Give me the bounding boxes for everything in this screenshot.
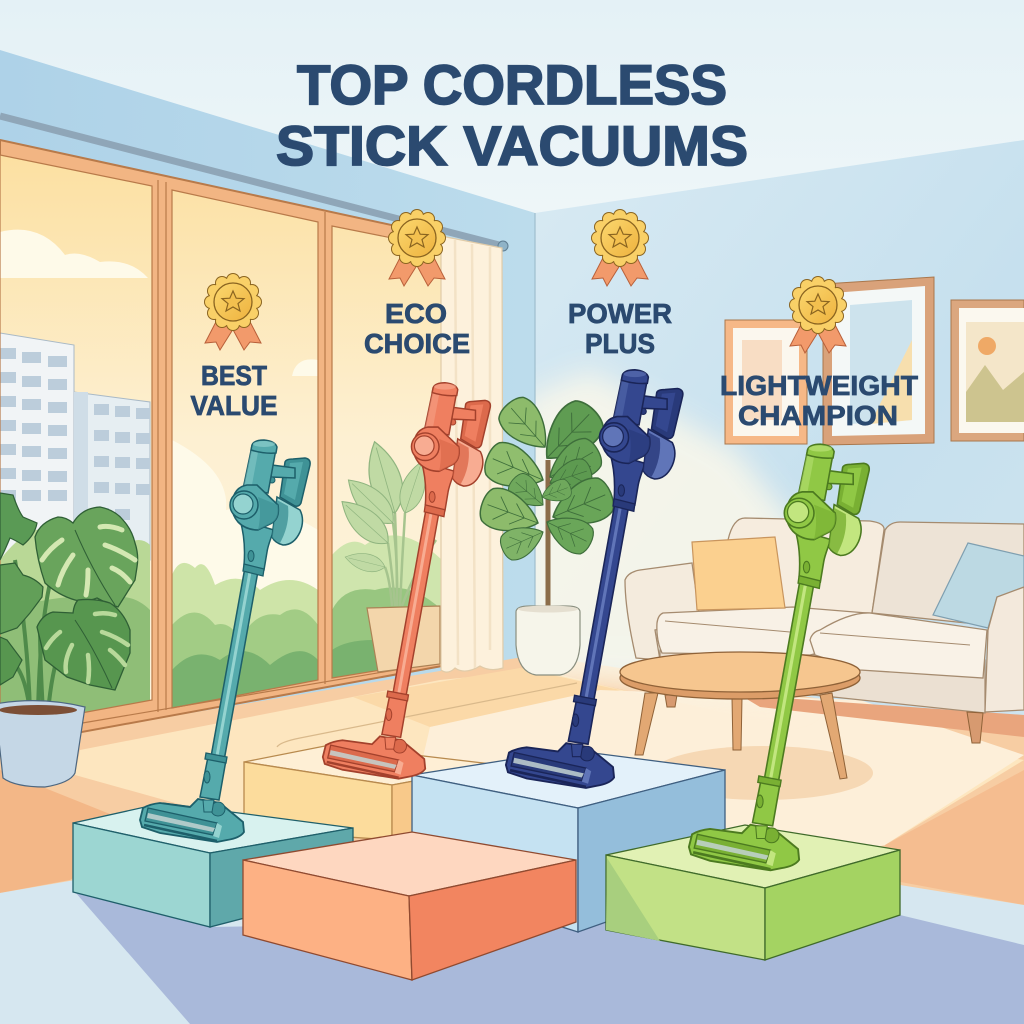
building 2 bbox=[74, 392, 150, 562]
badge: best value: VALUE bbox=[190, 390, 278, 421]
badge: power plus: PLUS bbox=[585, 328, 655, 359]
blue pillow bbox=[933, 543, 1024, 628]
badge: lightweight champion: LIGHTWEIGHT bbox=[720, 370, 918, 401]
monstera pot bbox=[0, 701, 85, 787]
podium: teal bbox=[73, 803, 353, 927]
vacuum: navy bbox=[506, 370, 683, 788]
sofa right arm bbox=[985, 587, 1024, 712]
title: STICK VACUUMS bbox=[276, 114, 748, 177]
right wall bbox=[535, 140, 1024, 780]
badge: eco choice: ECO bbox=[385, 298, 447, 329]
orange pillow bbox=[692, 537, 785, 610]
title bbox=[276, 53, 748, 177]
fiddle leaf plant bbox=[475, 391, 619, 675]
sofa bbox=[625, 518, 1024, 743]
light beams on wall bbox=[520, 370, 800, 700]
picture frames bbox=[725, 277, 1024, 445]
badge: lightweight champion bbox=[720, 276, 918, 431]
left wall bbox=[0, 50, 535, 780]
monstera plant bbox=[0, 493, 138, 787]
podium: blue bbox=[412, 750, 725, 932]
trees outside bbox=[0, 528, 442, 730]
ceiling bbox=[0, 0, 1024, 213]
podium: orange bbox=[243, 832, 576, 980]
title: TOP CORDLESS bbox=[297, 53, 727, 116]
building 1 bbox=[0, 333, 74, 560]
badge: power plus bbox=[568, 209, 672, 359]
floor bbox=[0, 655, 1024, 1024]
badge: best value bbox=[190, 273, 278, 421]
podium: yellow bbox=[244, 745, 500, 840]
curtain rod bbox=[0, 116, 508, 251]
badge: eco choice bbox=[364, 209, 470, 359]
badge: lightweight champion: CHAMPION bbox=[738, 400, 898, 431]
curtain bbox=[441, 236, 503, 672]
leaf lower large bbox=[37, 599, 130, 690]
badge: best value: BEST bbox=[201, 360, 267, 391]
window dividers bbox=[0, 155, 442, 737]
wall corner line bbox=[534, 213, 536, 655]
podium: green bbox=[606, 825, 900, 960]
vacuum: coral bbox=[323, 383, 490, 779]
clouds bbox=[0, 230, 318, 590]
coffee table bbox=[620, 652, 860, 779]
leaf bottom left bbox=[0, 637, 22, 685]
window view bbox=[0, 140, 445, 740]
window frame bbox=[0, 140, 442, 747]
sunlit floor patch and rug bbox=[0, 668, 1024, 905]
leaf top left bbox=[0, 493, 37, 560]
vacuum: teal bbox=[140, 440, 310, 842]
banana plant behind orange vacuum bbox=[333, 437, 440, 672]
badge: eco choice: CHOICE bbox=[364, 328, 470, 359]
badge: power plus: POWER bbox=[568, 298, 672, 329]
table shadow bbox=[653, 746, 873, 800]
bottom floor bbox=[0, 880, 1024, 1024]
leaf left middle bbox=[0, 563, 43, 634]
vacuum: green bbox=[689, 444, 869, 870]
leaf upper large bbox=[35, 507, 138, 607]
